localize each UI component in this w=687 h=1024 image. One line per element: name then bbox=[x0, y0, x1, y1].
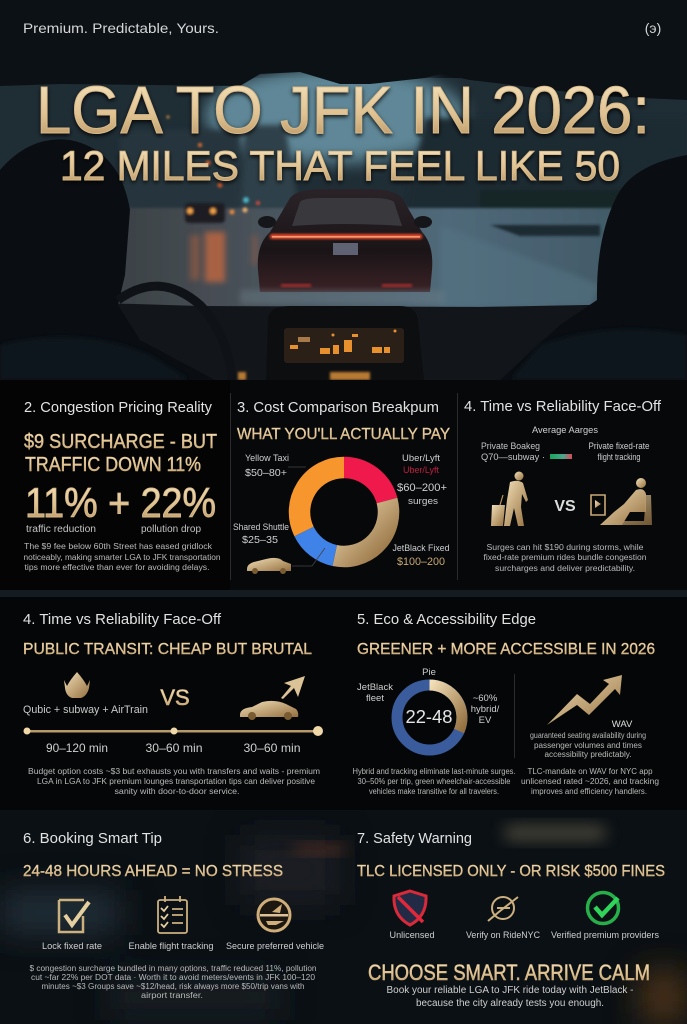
panel: public transit bbox=[0, 597, 344, 810]
time labels: 30–60 min bbox=[146, 741, 202, 755]
column labels: Private fixed-rate bbox=[588, 441, 650, 452]
body text: Budget option costs ~$3 but exhausts you with transfers and waits - premium bbox=[28, 767, 320, 776]
icon: green check bbox=[588, 892, 618, 924]
body text right: improves and efficiency handlers. bbox=[531, 787, 647, 796]
body text bbox=[24, 542, 220, 572]
big stats: 11% + 22% bbox=[25, 479, 216, 526]
closing text bbox=[386, 985, 634, 1009]
labels: $100–200 bbox=[397, 556, 445, 568]
vs label: VS bbox=[160, 685, 190, 710]
icon: bus blob bbox=[64, 672, 90, 698]
roof interior and mirror silhouette bbox=[0, 0, 687, 100]
column labels: flight tracking bbox=[598, 452, 640, 463]
donut labels: hybrid/ bbox=[471, 704, 500, 715]
heading: 4. Time vs Reliability Face-Off bbox=[23, 611, 222, 628]
body text: $ congestion surcharge bundled in many options, traffic reduced 11%, pollution bbox=[30, 964, 316, 973]
icon labels: Enable flight tracking bbox=[128, 941, 214, 952]
mini bar bbox=[550, 454, 572, 459]
icon labels: Secure preferred vehicle bbox=[226, 941, 324, 952]
icon labels bbox=[42, 941, 324, 952]
panel: cost comparison bbox=[230, 393, 450, 580]
time labels bbox=[46, 741, 300, 755]
panel: eco and accessibility bbox=[344, 597, 687, 810]
body text bbox=[484, 543, 646, 573]
main title: LGA TO JFK IN 2026: bbox=[36, 73, 650, 148]
time labels: 90–120 min bbox=[46, 741, 108, 755]
leader lines bbox=[288, 467, 325, 566]
heading: 5. Eco & Accessibility Edge bbox=[357, 611, 536, 628]
body text: noticeably, making smarter LGA to JFK transportation bbox=[24, 553, 220, 562]
icon labels: Verify on RideNYC bbox=[466, 930, 540, 941]
driver silhouette with steering wheel bbox=[0, 139, 232, 380]
panel: booking tip bbox=[23, 830, 324, 1000]
headline: TRAFFIC DOWN 11% bbox=[25, 454, 201, 476]
WAV text bbox=[530, 719, 646, 759]
main title: 12 MILES THAT FEEL LIKE 50 bbox=[60, 142, 620, 189]
body text right: TLC-mandate on WAV for NYC app bbox=[528, 767, 653, 776]
tagline: Premium. Predictable, Yours. bbox=[23, 20, 219, 36]
closing text: because the city already tests you enough. bbox=[416, 998, 604, 1009]
body text bbox=[30, 964, 316, 1000]
column labels bbox=[481, 425, 650, 463]
labels: surges bbox=[408, 496, 438, 507]
body text left: vehicles make transitive for all travelers. bbox=[369, 787, 499, 796]
donut labels: ~60% bbox=[473, 693, 498, 704]
headline: WHAT YOU'LL ACTUALLY PAY bbox=[237, 426, 450, 443]
WAV text: guaranteed seating availability during bbox=[530, 731, 646, 740]
body text: The $9 fee below 60th Street has eased gridlock bbox=[24, 542, 213, 551]
icon labels bbox=[390, 930, 659, 941]
passenger silhouette bbox=[500, 155, 687, 380]
donut labels bbox=[357, 667, 500, 726]
stat captions bbox=[26, 524, 201, 535]
heading: 7. Safety Warning bbox=[357, 830, 472, 847]
lead car: black sedan with red tail light bbox=[240, 189, 445, 304]
stat captions: traffic reduction bbox=[26, 524, 96, 535]
logo mark: (э) bbox=[645, 20, 661, 36]
body text: Surges can hit $190 during storms, while bbox=[486, 543, 644, 552]
body text right: unlicensed rated ~2026, and tracking bbox=[521, 777, 659, 786]
icon: rising arrow bbox=[547, 675, 622, 725]
body text: airport transfer. bbox=[141, 991, 203, 1000]
closing text: Book your reliable LGA to JFK ride today with JetBlack - bbox=[386, 985, 634, 996]
body text: minutes ~$3 Groups save ~$12/head, risk always more $50/trip vans with bbox=[42, 982, 304, 991]
body text bbox=[28, 767, 320, 796]
windshield scene bbox=[0, 67, 687, 308]
icon: traveler with suitcase bbox=[491, 472, 528, 526]
labels: Uber/Lyft bbox=[402, 453, 440, 464]
column labels: Private Boakeg bbox=[481, 441, 540, 452]
WAV text: WAV bbox=[612, 719, 633, 730]
labels: $60–200+ bbox=[397, 482, 447, 494]
WAV text: accessibility predictably. bbox=[544, 750, 632, 759]
icon: plane bbox=[281, 676, 305, 699]
body text: LGA in LGA to JFK premium lounges transportation tips can deliver positive bbox=[37, 777, 316, 786]
time labels: 30–60 min bbox=[244, 741, 300, 755]
body text left: 30–50% per trip, green wheelchair-accessible bbox=[358, 777, 511, 786]
panel: time vs reliability bbox=[457, 393, 662, 580]
labels: Yellow Taxi bbox=[245, 453, 289, 464]
traffic lights and reflections bbox=[166, 116, 260, 282]
icon: red shield bbox=[394, 891, 426, 925]
icon labels: Verified premium providers bbox=[551, 930, 659, 941]
body text: surcharges and deliver predictability. bbox=[495, 564, 635, 573]
stat captions: pollution drop bbox=[141, 524, 201, 535]
body text: sanity with door-to-door service. bbox=[114, 787, 240, 796]
timeline bbox=[24, 726, 323, 736]
main title bbox=[36, 73, 650, 189]
labels: $50–80+ bbox=[245, 467, 287, 479]
heading: 3. Cost Comparison Breakpum bbox=[237, 399, 439, 416]
icon: car bbox=[240, 701, 298, 720]
body text left: Hybrid and tracking eliminate last-minute surges. bbox=[352, 767, 516, 776]
icon: checkbox bbox=[59, 900, 89, 932]
vs label: VS bbox=[554, 498, 576, 515]
icon labels: Unlicensed bbox=[390, 930, 434, 941]
headline: $9 SURCHARGE - BUT bbox=[24, 431, 217, 453]
heading: 6. Booking Smart Tip bbox=[23, 830, 162, 847]
headline bbox=[24, 431, 217, 476]
body text right bbox=[521, 767, 659, 796]
donut: hybrid fleet bbox=[397, 685, 462, 750]
donut chart bbox=[300, 468, 389, 556]
body text: tips more effective than ever for avoiding delays. bbox=[24, 563, 210, 572]
body text left bbox=[352, 767, 516, 796]
donut labels: Pie bbox=[422, 667, 436, 678]
headline: GREENER + MORE ACCESSIBLE IN 2026 bbox=[357, 641, 655, 658]
column labels: Average Aarges bbox=[532, 425, 599, 435]
headline: 24-48 HOURS AHEAD = NO STRESS bbox=[23, 863, 283, 880]
transit label: Qubic + subway + AirTrain bbox=[23, 704, 148, 716]
heading: 4. Time vs Reliability Face-Off bbox=[464, 398, 662, 415]
labels: JetBlack Fixed bbox=[392, 543, 450, 554]
labels: Shared Shuttle bbox=[233, 522, 289, 533]
lower background bbox=[0, 380, 687, 1024]
hero photo: rainy windshield view bbox=[0, 0, 687, 380]
body text: fixed-rate premium rides bundle congestion bbox=[484, 553, 646, 562]
icon: car bbox=[247, 558, 291, 574]
panel: safety warning bbox=[357, 830, 665, 1009]
donut labels: JetBlack bbox=[357, 682, 393, 693]
headline: PUBLIC TRANSIT: CHEAP BUT BRUTAL bbox=[23, 641, 312, 658]
dashboard with amber display bbox=[0, 300, 687, 380]
labels: $25–35 bbox=[242, 534, 278, 546]
icon: gold verification mark bbox=[488, 897, 518, 921]
column labels: Q70—subway · bbox=[481, 452, 545, 463]
icon: vehicle badge bbox=[258, 899, 290, 931]
donut center value: 22-48 bbox=[406, 707, 452, 727]
heading: 2. Congestion Pricing Reality bbox=[24, 399, 212, 416]
donut labels: EV bbox=[479, 715, 492, 726]
labels bbox=[233, 453, 450, 568]
body text: cut ~far 22% per DOT data · Worth it to avoid meters/events in JFK 100–120 bbox=[31, 973, 316, 982]
labels: Uber/Lyft bbox=[403, 465, 439, 476]
donut labels: fleet bbox=[366, 693, 384, 704]
WAV text: passenger volumes and times bbox=[534, 741, 642, 750]
icon: checklist bbox=[158, 896, 187, 933]
panel: congestion pricing bbox=[0, 380, 230, 590]
icon: seated passenger with screen bbox=[591, 478, 652, 525]
icon labels: Lock fixed rate bbox=[42, 941, 102, 952]
headline: TLC LICENSED ONLY - OR RISK $500 FINES bbox=[357, 863, 665, 880]
